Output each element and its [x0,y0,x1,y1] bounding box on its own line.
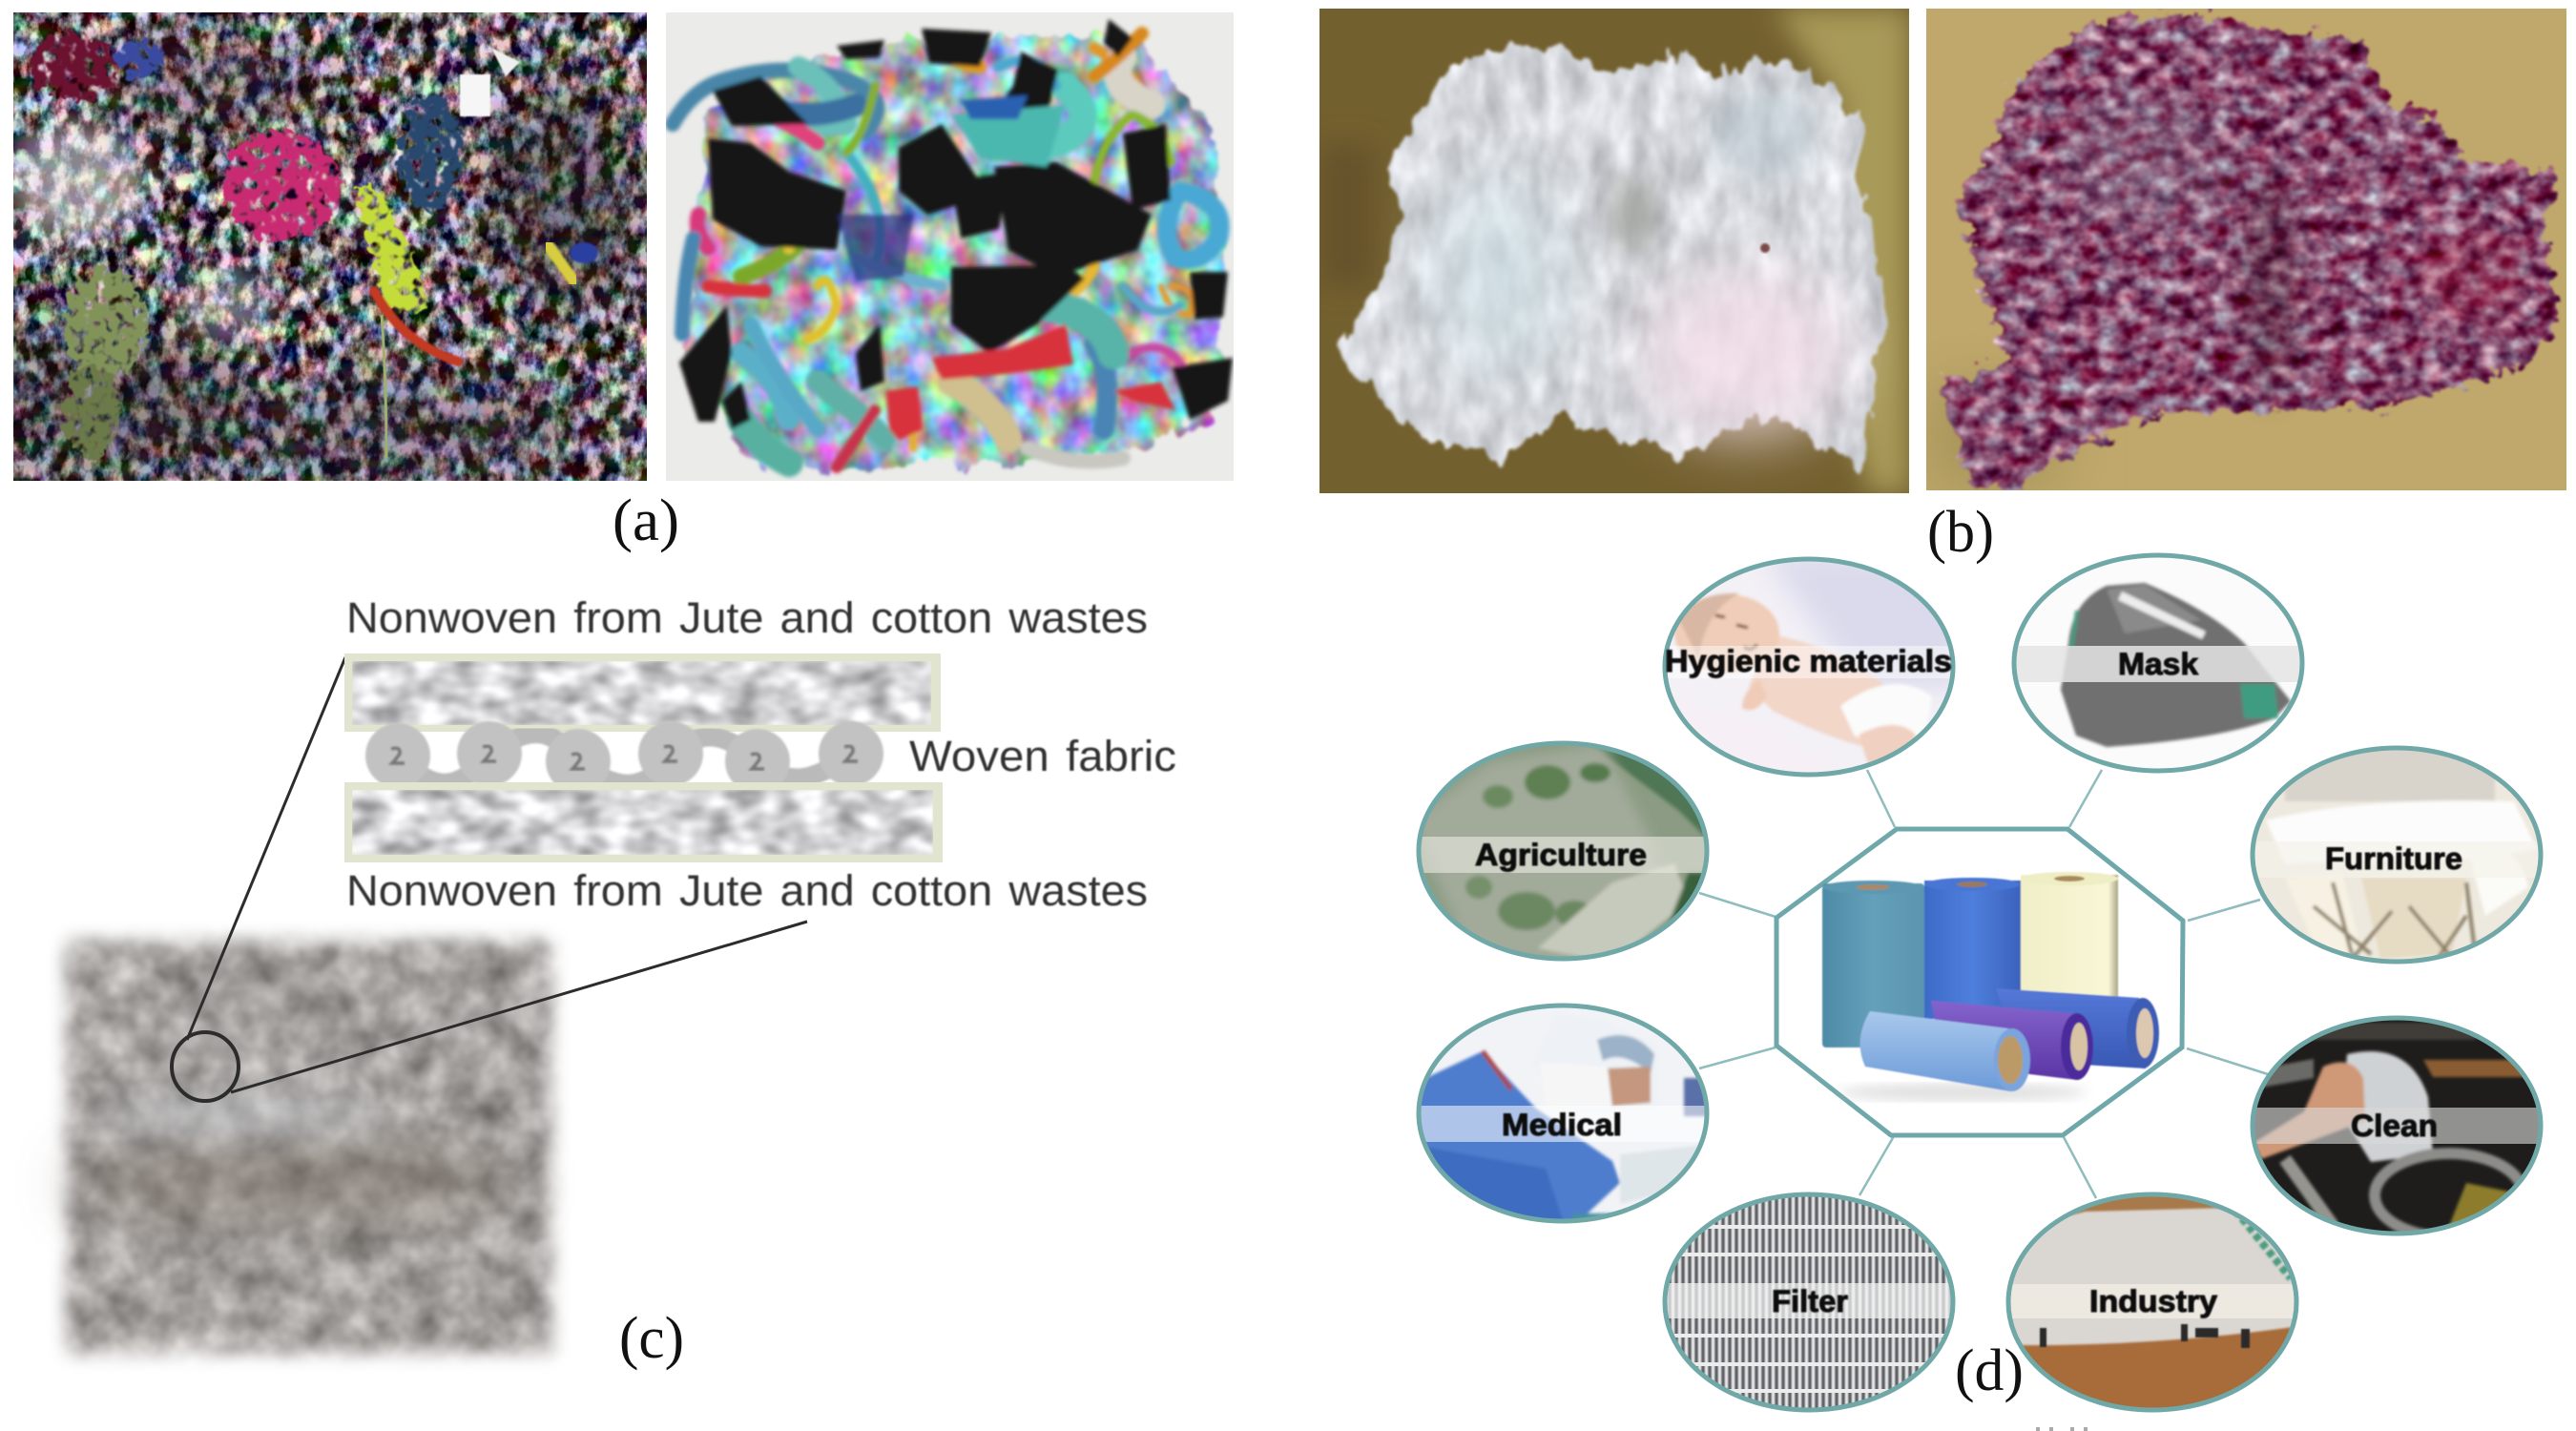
label: woven fabric: Woven fabric [909,732,1176,780]
photo: nonwoven fabric sample [67,941,551,1353]
application: medical: Medical [1502,1108,1622,1142]
label band [2010,646,2306,682]
panel b: recovered fibres photos [1319,9,2566,565]
zoom lines and circle [172,657,807,1101]
label band [1658,1283,1963,1318]
label band [2247,1108,2547,1144]
panel a: textile waste photos [0,12,1234,553]
label: bottom nonwoven: Nonwoven from Jute and cotton wastes [346,866,1148,915]
application: hygienic materials [1658,553,1963,782]
label band [2005,1284,2300,1318]
clipped residual marks at bottom edge [2038,1427,2086,1431]
panel c: nonwoven composite structure [67,593,1176,1371]
application: industry: Industry [2089,1284,2217,1318]
application: clean [2247,1011,2547,1240]
white paper tag [460,74,490,116]
caption (a): (a) [613,488,679,553]
panel d: nonwoven applications hub diagram [1412,551,2547,1431]
caption (b): (b) [1927,500,1994,565]
application: filter [1658,1188,1963,1417]
top nonwoven layer [344,653,941,732]
connector lines [1699,770,2268,1198]
application: mask: Mask [2118,647,2198,681]
label band [1412,1106,1717,1142]
label: top nonwoven: Nonwoven from Jute and cotton wastes [346,593,1148,642]
bottom nonwoven layer [344,782,943,862]
application: industry [2005,1188,2300,1417]
application: clean: Clean [2351,1109,2438,1143]
caption (c): (c) [619,1306,684,1371]
caption (d): (d) [1955,1338,2024,1403]
application: furniture: Furniture [2325,841,2462,876]
photo: red-grey recycled fibre [1926,9,2566,491]
label band [2276,841,2536,878]
label band [1412,837,1717,873]
application: agriculture: Agriculture [1475,838,1647,872]
application: hygienic materials: Hygienic materials [1665,644,1952,678]
application: mask [2010,551,2306,776]
application: furniture [2247,744,2547,968]
center octagon with nonwoven rolls [1776,829,2183,1135]
woven fabric cross-section [365,721,883,794]
application: medical [1412,1002,1717,1231]
label band [1658,646,1963,678]
photo: heap of mixed textile waste [0,12,647,487]
application: agriculture [1412,739,1717,964]
photo: white recycled fibre [1319,9,1909,493]
photo: colored fabric cuttings [666,12,1234,481]
application: filter: Filter [1772,1284,1848,1318]
